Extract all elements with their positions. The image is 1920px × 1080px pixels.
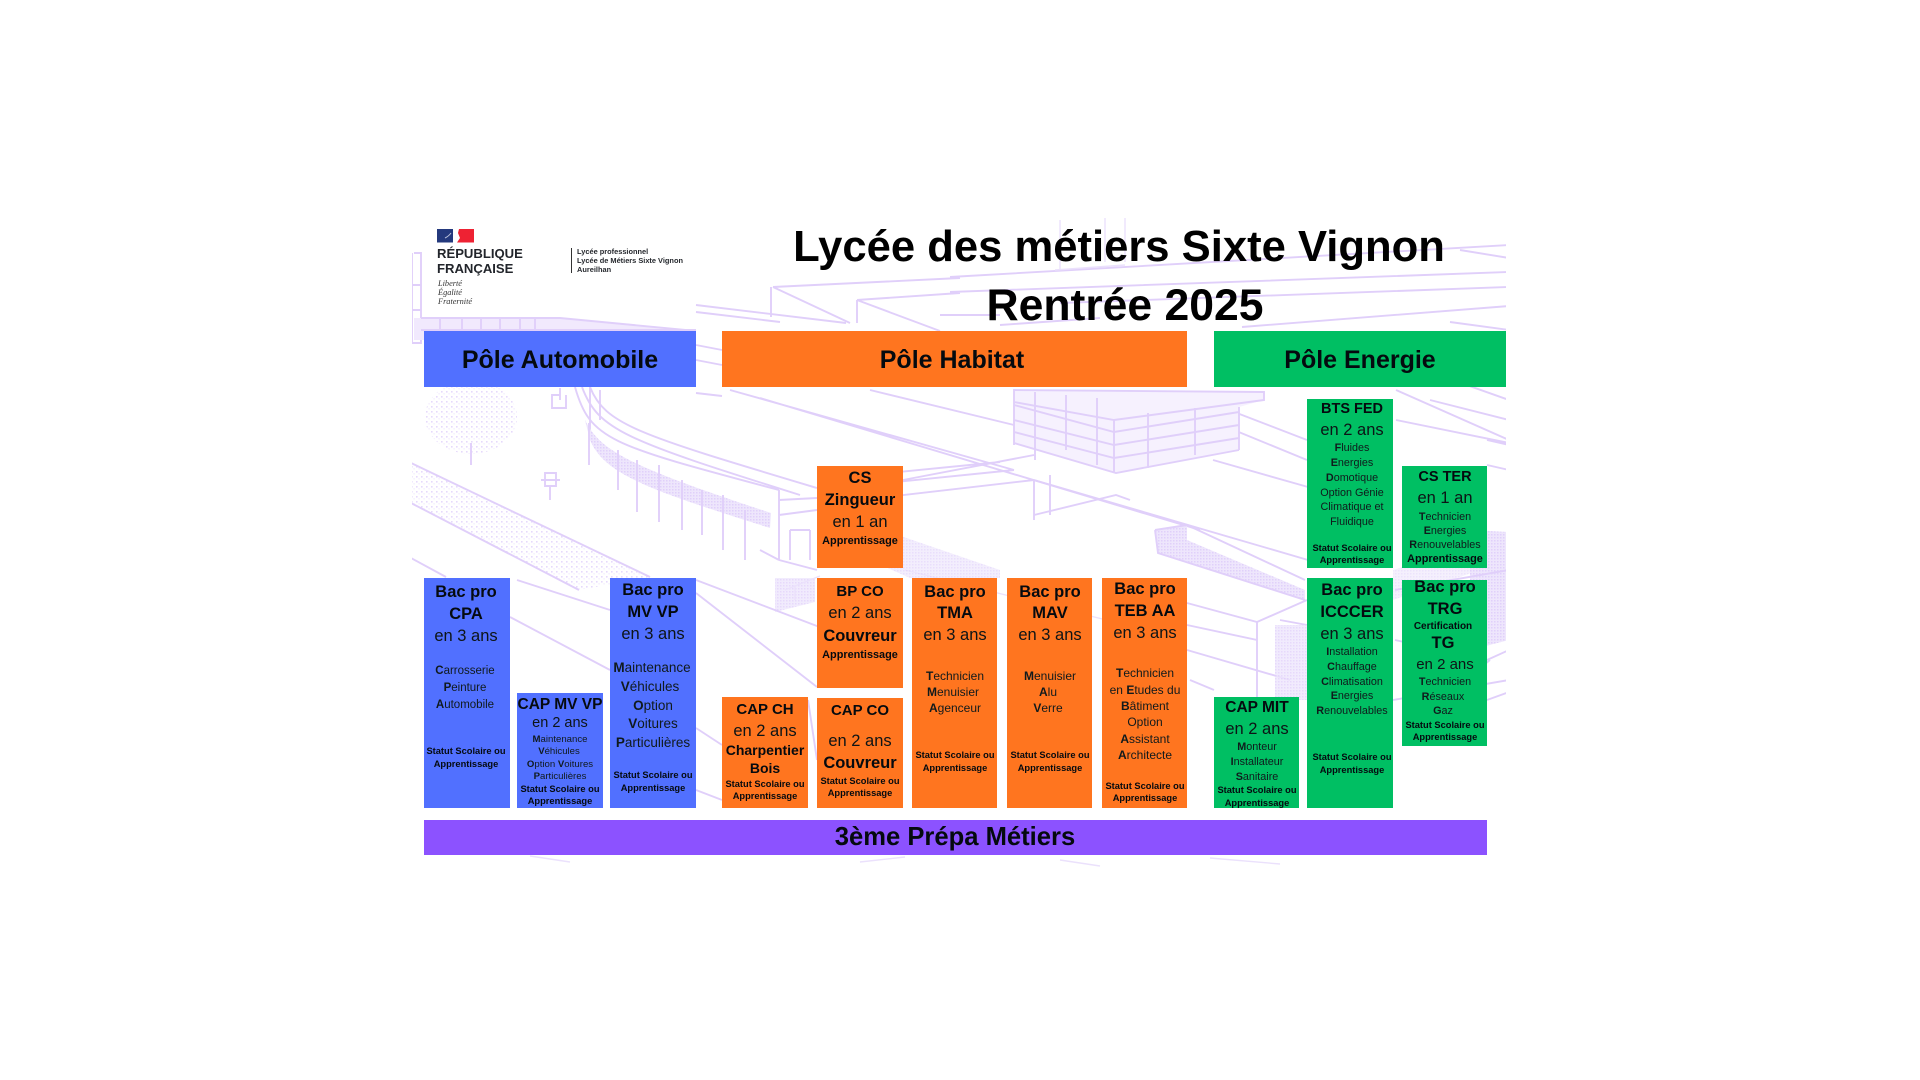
panel: CAP MIT: en 2 ans: [1225, 720, 1289, 738]
panel: Bac pro MV VP: [610, 578, 696, 808]
panel: Bac pro ICCCER: Bac pro: [1321, 581, 1383, 599]
panel: BTS FED: BTS FED: [1321, 401, 1383, 417]
panel: BTS FED: Energies: [1331, 457, 1374, 469]
panel: CS TER: en 1 an: [1417, 489, 1473, 507]
panel: CAP MV VP: en 2 ans: [532, 715, 588, 731]
panel: Bac pro CPA: [424, 578, 510, 808]
panel: CAP MIT: Sanitaire: [1236, 771, 1278, 783]
panel: Bac pro TEB AA: [1102, 578, 1187, 808]
panel: Bac pro MAV: MAV: [1032, 604, 1068, 622]
logo wordmark: RÉPUBLIQUE: [437, 246, 523, 261]
panel: Bac pro TEB AA: Apprentissage: [1113, 793, 1177, 803]
panel: Bac pro TRG / TG: TRG: [1428, 600, 1462, 618]
panel: Bac pro TMA: Bac pro: [924, 583, 986, 601]
panel: Bac pro TRG / TG: en 2 ans: [1416, 656, 1474, 673]
background: building line drawing: [411, 215, 1509, 866]
panel: Bac pro TMA: TMA: [937, 604, 973, 622]
icon: French flag marianne: [437, 229, 474, 242]
panel: BTS FED: Statut Scolaire ou: [1312, 543, 1392, 553]
panel: Bac pro ICCCER: [1307, 578, 1393, 808]
panel: Bac pro TRG / TG: Réseaux: [1422, 691, 1465, 703]
school name block: [571, 247, 683, 274]
logo: République Française: [437, 229, 523, 306]
school name block: Aureilhan: [577, 265, 612, 274]
panel: CAP MV VP: Apprentissage: [528, 796, 592, 806]
panel: Bac pro MV VP: en 3 ans: [621, 625, 685, 643]
logo motto: Fraternité: [437, 297, 472, 306]
panel: Bac pro CPA: Automobile: [436, 699, 494, 711]
panel: Bac pro TMA: Apprentissage: [923, 763, 987, 773]
panel: Bac pro TEB AA: Bâtiment: [1121, 699, 1170, 713]
panel: CAP CH: Apprentissage: [733, 791, 797, 801]
panel: Bac pro CPA: Peinture: [444, 682, 486, 694]
panel: CS TER: [1402, 466, 1487, 568]
panel: CAP CH: Statut Scolaire ou: [725, 779, 805, 789]
panel: Bac pro ICCCER: Apprentissage: [1320, 765, 1384, 775]
panel: Bac pro ICCCER: ICCCER: [1320, 603, 1384, 621]
panel: CAP MV VP: Particulières: [534, 771, 587, 782]
panel: Bac pro TRG / TG: Statut Scolaire ou: [1405, 720, 1485, 730]
panel: CS TER: Energies: [1424, 525, 1467, 537]
panel: Bac pro TRG / TG: Technicien: [1419, 676, 1471, 688]
panel: CS TER: Technicien: [1419, 511, 1471, 523]
title: Lycée des métiers Sixte Vignon: [793, 223, 1445, 271]
panel: CS Zingueur: CS: [849, 469, 871, 487]
logo motto: [437, 279, 472, 306]
school name block: Lycée professionnel: [577, 247, 648, 256]
panel: Bac pro TEB AA: Bac pro: [1114, 580, 1176, 598]
panel: Bac pro TRG / TG: Bac pro: [1414, 578, 1476, 596]
panel: CAP MV VP: Option Voitures: [527, 759, 593, 770]
panel: Bac pro TEB AA: Option: [1127, 715, 1163, 729]
panel: CAP CH: Charpentier: [726, 742, 805, 758]
panel: CAP CH: [722, 697, 808, 808]
panel: Bac pro MAV: Statut Scolaire ou: [1010, 750, 1090, 760]
panel: CAP MIT: CAP MIT: [1225, 699, 1289, 716]
logo motto: Liberté: [437, 279, 462, 288]
bar: 3ème Prépa Métiers: [424, 820, 1487, 855]
panel: CAP MV VP: Statut Scolaire ou: [520, 784, 600, 794]
panel: BP CO: Apprentissage: [822, 649, 898, 661]
panel: Bac pro TRG / TG: TG: [1432, 634, 1454, 652]
panel: Bac pro MAV: Verre: [1033, 701, 1063, 715]
panel: CS Zingueur: en 1 an: [832, 513, 888, 531]
panel: CAP MIT: Statut Scolaire ou: [1217, 785, 1297, 795]
panel: Bac pro MAV: Apprentissage: [1018, 763, 1082, 773]
panel: CS Zingueur: Zingueur: [825, 491, 896, 509]
bar: 3ème Prépa Métiers: 3ème Prépa Métiers: [835, 823, 1075, 851]
panel: Bac pro TEB AA: Statut Scolaire ou: [1105, 781, 1185, 791]
panel: BP CO: [817, 578, 903, 688]
panel: Bac pro MAV: Menuisier: [1024, 669, 1076, 683]
panel: CAP CO: [817, 698, 903, 808]
panel: Bac pro MV VP: Apprentissage: [621, 783, 685, 793]
panel: BTS FED: [1307, 399, 1393, 568]
panel: BP CO: BP CO: [836, 583, 884, 600]
panel: Bac pro ICCCER: Chauffage: [1327, 661, 1377, 673]
panel: Bac pro MV VP: Option: [633, 698, 673, 713]
panel: BTS FED: Option Génie: [1320, 487, 1384, 499]
panel: Bac pro TMA: Technicien: [926, 669, 984, 683]
panel: Bac pro TRG / TG: Apprentissage: [1413, 732, 1477, 742]
panel: Bac pro MAV: Bac pro: [1019, 583, 1081, 601]
header: Pôle Automobile: [424, 331, 696, 387]
panel: Bac pro TEB AA: en Etudes du: [1110, 683, 1180, 697]
panel: Bac pro MV VP: Particulières: [616, 735, 690, 750]
panel: Bac pro CPA: en 3 ans: [434, 627, 498, 645]
school name block: Lycée de Métiers Sixte Vignon: [577, 256, 683, 265]
title: Rentrée 2025: [986, 281, 1264, 330]
logo wordmark: [437, 246, 523, 276]
panel: Bac pro TMA: Menuisier: [927, 685, 979, 699]
panel: Bac pro MV VP: Véhicules: [621, 679, 680, 694]
panel: CAP MIT: Apprentissage: [1225, 798, 1289, 808]
panel: CAP CO: Statut Scolaire ou: [820, 776, 900, 786]
panel: Bac pro TMA: en 3 ans: [923, 626, 987, 644]
panel: Bac pro MV VP: Statut Scolaire ou: [613, 770, 693, 780]
panel: Bac pro ICCCER: Climatisation: [1321, 676, 1383, 688]
panel: Bac pro TMA: Statut Scolaire ou: [915, 750, 995, 760]
panel: CAP CH: Bois: [750, 760, 780, 776]
panel: Bac pro TRG / TG: Certification: [1414, 621, 1472, 632]
panel: Bac pro ICCCER: Energies: [1331, 690, 1374, 702]
panel: Bac pro TRG / TG: [1402, 578, 1487, 746]
panel: Bac pro TEB AA: TEB AA: [1115, 602, 1175, 620]
panel: Bac pro ICCCER: Statut Scolaire ou: [1312, 752, 1392, 762]
header: Pôle Energie: [1214, 331, 1506, 387]
panel: Bac pro CPA: Carrosserie: [435, 665, 495, 677]
panel: CS TER: CS TER: [1418, 469, 1472, 485]
panel: Bac pro TEB AA: Architecte: [1118, 748, 1172, 762]
panel: Bac pro MV VP: Maintenance: [613, 660, 691, 675]
panel: CAP MIT: Installateur: [1231, 756, 1284, 768]
panel: CAP MV VP: Maintenance: [533, 734, 587, 745]
panel: CAP MV VP: Véhicules: [538, 746, 580, 757]
panel: BTS FED: Fluidique: [1330, 516, 1374, 528]
panel: Bac pro MAV: Alu: [1039, 685, 1057, 699]
panel: Bac pro MV VP: MV VP: [627, 603, 679, 621]
header: Pôle Habitat: Pôle Habitat: [880, 346, 1025, 374]
panel: CAP CO: CAP CO: [831, 702, 889, 719]
panel: CAP CH: en 2 ans: [733, 722, 797, 740]
panel: Bac pro TEB AA: Technicien: [1116, 666, 1174, 680]
title: [793, 223, 1445, 330]
panel: CS TER: Renouvelables: [1409, 539, 1481, 551]
logo wordmark: FRANÇAISE: [437, 261, 514, 276]
header: Pôle Habitat: [722, 331, 1187, 387]
panel: Bac pro TMA: [912, 578, 997, 808]
panel: BTS FED: en 2 ans: [1320, 421, 1384, 439]
panel: BTS FED: Apprentissage: [1320, 555, 1384, 565]
panel: BTS FED: Fluides: [1335, 442, 1370, 454]
panel: BTS FED: Climatique et: [1320, 501, 1384, 513]
panel: CS Zingueur: Apprentissage: [822, 535, 898, 547]
panel: CAP CH: CAP CH: [736, 701, 794, 718]
header: Pôle Automobile: Pôle Automobile: [462, 346, 658, 374]
logo motto: Égalité: [437, 287, 462, 297]
panel: BTS FED: Domotique: [1326, 472, 1378, 484]
panel: Bac pro MAV: en 3 ans: [1018, 626, 1082, 644]
panel: CS Zingueur: [817, 466, 903, 568]
panel: Bac pro CPA: Bac pro: [435, 583, 497, 601]
panel: CS TER: Apprentissage: [1407, 553, 1483, 565]
panel: Bac pro TEB AA: Assistant: [1120, 732, 1170, 746]
panel: Bac pro TEB AA: en 3 ans: [1113, 624, 1177, 642]
panel: Bac pro TRG / TG: Gaz: [1433, 705, 1453, 717]
panel: CAP MIT: [1214, 697, 1299, 808]
panel: CAP CO: Couvreur: [823, 754, 897, 772]
panel: Bac pro MV VP: Bac pro: [622, 581, 684, 599]
panel: Bac pro CPA: Apprentissage: [434, 759, 498, 769]
panel: CAP MV VP: [517, 693, 603, 808]
panel: Bac pro TMA: Agenceur: [929, 701, 981, 715]
panel: BP CO: Couvreur: [823, 627, 897, 645]
panel: Bac pro ICCCER: Installation: [1326, 646, 1378, 658]
panel: Bac pro ICCCER: en 3 ans: [1320, 625, 1384, 643]
panel: CAP CO: en 2 ans: [828, 732, 892, 750]
panel: Bac pro CPA: CPA: [449, 605, 483, 623]
panel: CAP MIT: Monteur: [1237, 741, 1277, 753]
panel: Bac pro MAV: [1007, 578, 1092, 808]
panel: Bac pro MV VP: Voitures: [628, 716, 678, 731]
header: Pôle Energie: Pôle Energie: [1284, 346, 1436, 374]
panel: CAP CO: Apprentissage: [828, 788, 892, 798]
panel: Bac pro ICCCER: Renouvelables: [1316, 705, 1388, 717]
panel: Bac pro CPA: Statut Scolaire ou: [426, 746, 506, 756]
panel: BP CO: en 2 ans: [828, 604, 892, 622]
panel: CAP MV VP: CAP MV VP: [518, 696, 602, 713]
